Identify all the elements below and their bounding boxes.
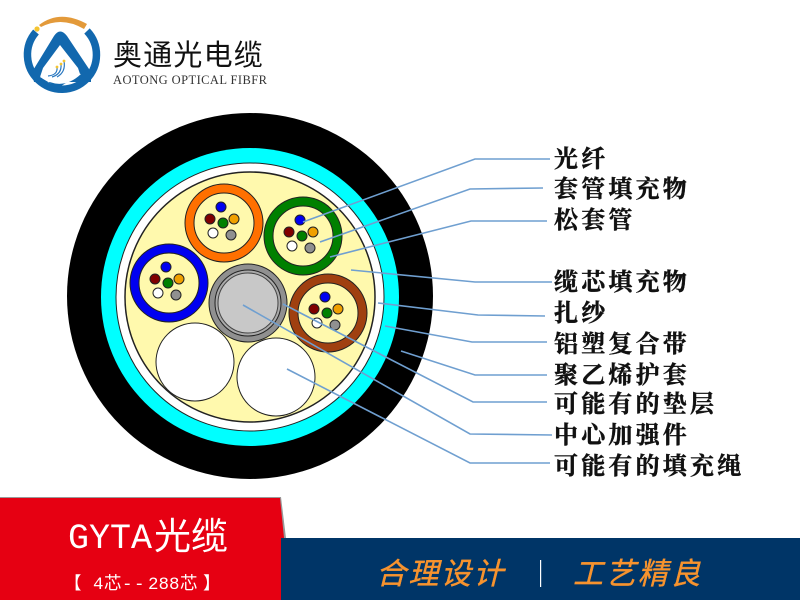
component labels: 缆芯填充物 (554, 262, 690, 297)
component labels: 扎纱 (554, 293, 608, 328)
component labels: 聚乙烯护套 (554, 355, 690, 390)
title banner: 芯 (180, 574, 198, 595)
logo english name: AOTONG OPTICAL FIBFR (113, 73, 268, 87)
slogan bar: 合理设计 (376, 549, 506, 593)
logo company name: 奥通光电缆 (113, 32, 264, 74)
component labels: 松套管 (554, 200, 636, 235)
title banner: -- (122, 575, 145, 595)
aluminum-plastic tape (101, 148, 399, 446)
component labels: 可能有的垫层 (554, 384, 717, 419)
cable cross-section (67, 113, 433, 479)
green loose tube (264, 197, 342, 275)
title banner: 【 (64, 574, 82, 595)
title banner: 】 (203, 574, 220, 595)
title banner: 光缆 (154, 506, 228, 560)
slogan bar (281, 538, 800, 600)
orange loose tube (185, 184, 263, 262)
title banner (0, 497, 286, 600)
title banner: 芯 (104, 574, 122, 595)
component labels (554, 139, 744, 481)
filler rope left (156, 323, 234, 401)
title banner: 288 (148, 575, 180, 595)
logo emblem (27, 17, 96, 89)
slogan bar: 工艺精良 (573, 549, 703, 593)
filler rope right (237, 338, 315, 416)
title banner: 4 (93, 575, 104, 595)
leader lines (243, 159, 552, 463)
component labels: 可能有的填充绳 (554, 446, 744, 481)
component labels: 套管填充物 (554, 169, 690, 204)
outer black polyethylene sheath (67, 113, 433, 479)
component labels: 中心加强件 (554, 415, 690, 450)
component labels: 光纤 (554, 139, 608, 174)
core filler (125, 172, 375, 422)
binding yarn ring (116, 163, 384, 431)
title banner: GYTA (68, 519, 152, 559)
blue loose tube (130, 244, 208, 322)
component labels: 铝塑复合带 (554, 324, 690, 359)
brown loose tube (289, 274, 367, 352)
central strength member (209, 264, 287, 342)
